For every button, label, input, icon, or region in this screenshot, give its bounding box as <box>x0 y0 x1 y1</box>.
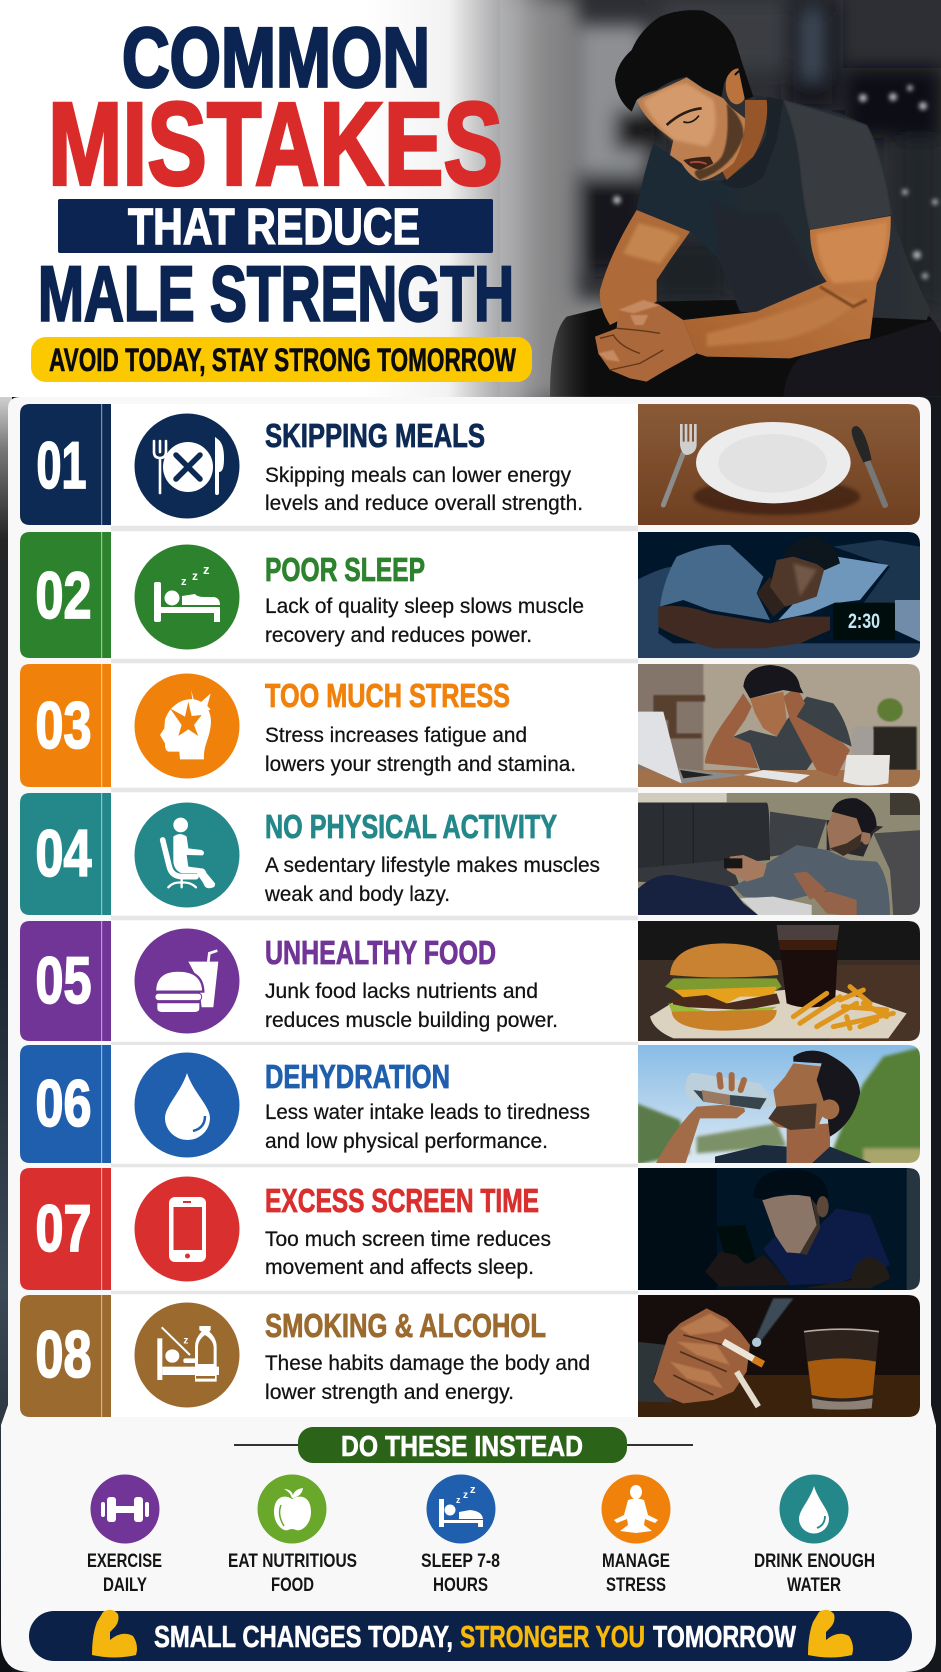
icon: head with stress burst <box>134 674 240 778</box>
description: recovery and reduces power. <box>265 624 532 647</box>
photo: man drinking water <box>637 1045 923 1165</box>
photo: man on sofa <box>637 792 923 917</box>
photo: man on phone in the dark <box>637 1167 923 1290</box>
photo: cigarette and whisky <box>637 1295 923 1418</box>
hands <box>595 300 697 382</box>
description: Too much screen time reduces <box>265 1228 551 1251</box>
description: and low physical performance. <box>265 1130 548 1153</box>
number badge 04 <box>20 793 111 915</box>
description: lower strength and energy. <box>265 1381 514 1404</box>
face <box>637 77 745 181</box>
number badge 05: 05 <box>36 944 92 1017</box>
number badge 01 <box>20 404 111 525</box>
tip: sleep 7-8 hours <box>421 1474 500 1596</box>
banner highlight: STRONGER YOU <box>460 1619 645 1654</box>
icon: burger and drink <box>134 928 240 1034</box>
description <box>265 464 583 515</box>
description <box>265 595 584 647</box>
icon: bed, cigarette and bottle: z <box>183 1335 188 1346</box>
description: Junk food lacks nutrients and <box>265 980 538 1003</box>
description: Less water intake leads to tiredness <box>265 1101 590 1124</box>
row 6: dehydration <box>20 1045 923 1165</box>
yellow tagline pill: AVOID TODAY, STAY STRONG TOMORROW <box>49 342 517 378</box>
hair <box>615 10 753 112</box>
row 8: smoking and alcohol <box>20 1295 923 1418</box>
icon: left flexed arm <box>92 1610 137 1658</box>
banner ending: TOMORROW <box>653 1619 797 1654</box>
description: These habits damage the body and <box>265 1352 590 1375</box>
white content panel <box>1 397 936 1672</box>
icon: right flexed arm <box>808 1610 853 1658</box>
heading: SMOKING & ALCOHOL <box>265 1307 546 1344</box>
title <box>31 10 532 382</box>
tip: manage stress: STRESS <box>606 1574 666 1596</box>
number badge 03: 03 <box>36 689 92 762</box>
title line: common: COMMON <box>122 10 430 104</box>
number badge 06 <box>20 1045 111 1163</box>
tip: exercise daily: DAILY <box>103 1574 147 1596</box>
decorative side rules with pill heading <box>234 1427 693 1463</box>
description: Lack of quality sleep slows muscle <box>265 595 584 618</box>
row 4: no physical activity <box>20 792 923 917</box>
yellow tagline pill <box>31 337 532 382</box>
pants <box>550 300 941 397</box>
left edge backdrop <box>0 385 12 1672</box>
title line: mistakes: MISTAKES <box>48 78 503 210</box>
number badge 07: 07 <box>36 1192 92 1265</box>
row 5: unhealthy food <box>20 920 923 1043</box>
number badge 07 <box>20 1168 111 1290</box>
photo: stressed man at laptop <box>637 662 923 792</box>
row 2: poor sleep <box>20 530 923 660</box>
tip: eat nutritious food <box>228 1474 357 1596</box>
section: do these instead <box>87 1427 875 1596</box>
heading: POOR SLEEP <box>265 551 425 588</box>
tip: sleep 7-8 hours: z <box>470 1484 476 1496</box>
description: movement and affects sleep. <box>265 1256 534 1279</box>
tip: drink enough water: WATER <box>787 1574 841 1596</box>
description <box>264 854 600 906</box>
photo: man awake in bed with clock <box>637 530 923 660</box>
description <box>265 1101 590 1153</box>
description: Skipping meals can lower energy <box>265 464 571 487</box>
title line: male strength: MALE STRENGTH <box>38 250 514 338</box>
photo: burger, cola and fries <box>637 920 923 1043</box>
tip: exercise daily <box>87 1474 162 1596</box>
description <box>265 1228 551 1279</box>
heading: DEHYDRATION <box>265 1058 450 1095</box>
heading: NO PHYSICAL ACTIVITY <box>265 808 557 845</box>
heading: TOO MUCH STRESS <box>265 677 510 714</box>
white fade over photo <box>0 0 590 397</box>
row 7: excess screen time <box>20 1167 923 1290</box>
number badge 06: 06 <box>36 1067 92 1140</box>
heading: UNHEALTHY FOOD <box>265 934 496 971</box>
photo: empty plate <box>637 403 923 527</box>
description: weak and body lazy. <box>264 883 450 906</box>
photo: man awake in bed with clock: 2:30 <box>848 610 880 633</box>
heading: EXCESS SCREEN TIME <box>265 1182 539 1219</box>
decorative side rules with pill heading: DO THESE INSTEAD <box>341 1431 583 1463</box>
header <box>0 0 941 397</box>
number badge 08 <box>20 1295 111 1417</box>
description: levels and reduce overall strength. <box>265 492 583 515</box>
icon: person in bed: z <box>181 576 187 588</box>
icon: person in bed <box>134 544 240 650</box>
tip: drink enough water: DRINK ENOUGH <box>754 1550 875 1572</box>
number badge 04: 04 <box>36 817 92 890</box>
row separators <box>111 526 638 1294</box>
tip: sleep 7-8 hours: SLEEP 7-8 <box>421 1550 500 1572</box>
description: A sedentary lifestyle makes muscles <box>265 854 600 877</box>
icon: smartphone <box>134 1176 240 1282</box>
icon: water drop <box>134 1052 240 1158</box>
number badge 05 <box>20 921 111 1041</box>
left arm <box>600 210 690 325</box>
number badge 08: 08 <box>36 1318 92 1391</box>
tip: eat nutritious food: FOOD <box>271 1574 314 1596</box>
description <box>265 980 558 1032</box>
number badge 02 <box>20 532 111 658</box>
tip: manage stress: MANAGE <box>602 1550 670 1572</box>
description: Stress increases fatigue and <box>265 724 527 747</box>
description: lowers your strength and stamina. <box>265 753 576 776</box>
ear <box>726 68 748 104</box>
tip: eat nutritious food: EAT NUTRITIOUS <box>228 1550 357 1572</box>
row 3: too much stress <box>20 662 923 792</box>
banner slogan: SMALL CHANGES TODAY, <box>154 1619 453 1654</box>
tip: sleep 7-8 hours: z <box>456 1495 461 1505</box>
icon: plate with cross <box>134 414 240 518</box>
right arm <box>683 216 891 358</box>
hero photo: man sitting in gym <box>500 0 941 397</box>
description: reduces muscle building power. <box>265 1009 558 1032</box>
icon: person in bed: z <box>203 562 210 577</box>
bottom banner <box>29 1610 912 1661</box>
description <box>265 724 576 776</box>
tip: manage stress <box>602 1474 670 1596</box>
icon: bed, cigarette and bottle <box>134 1302 240 1408</box>
tip: drink enough water <box>754 1474 875 1596</box>
neck <box>722 100 767 180</box>
number badge 01: 01 <box>36 429 86 502</box>
shirt <box>637 95 930 320</box>
number badge 02: 02 <box>36 559 92 632</box>
icon: person in bed: z <box>192 569 198 583</box>
row 1: skipping meals <box>20 403 923 527</box>
number badge 03 <box>20 664 111 787</box>
tip: sleep 7-8 hours: HOURS <box>433 1574 488 1596</box>
icon: seated person <box>134 802 240 908</box>
tip: exercise daily: EXERCISE <box>87 1550 162 1572</box>
heading: SKIPPING MEALS <box>265 417 485 454</box>
description <box>265 1352 590 1404</box>
tip: sleep 7-8 hours: z <box>463 1490 468 1501</box>
title band: THAT REDUCE <box>128 198 420 255</box>
